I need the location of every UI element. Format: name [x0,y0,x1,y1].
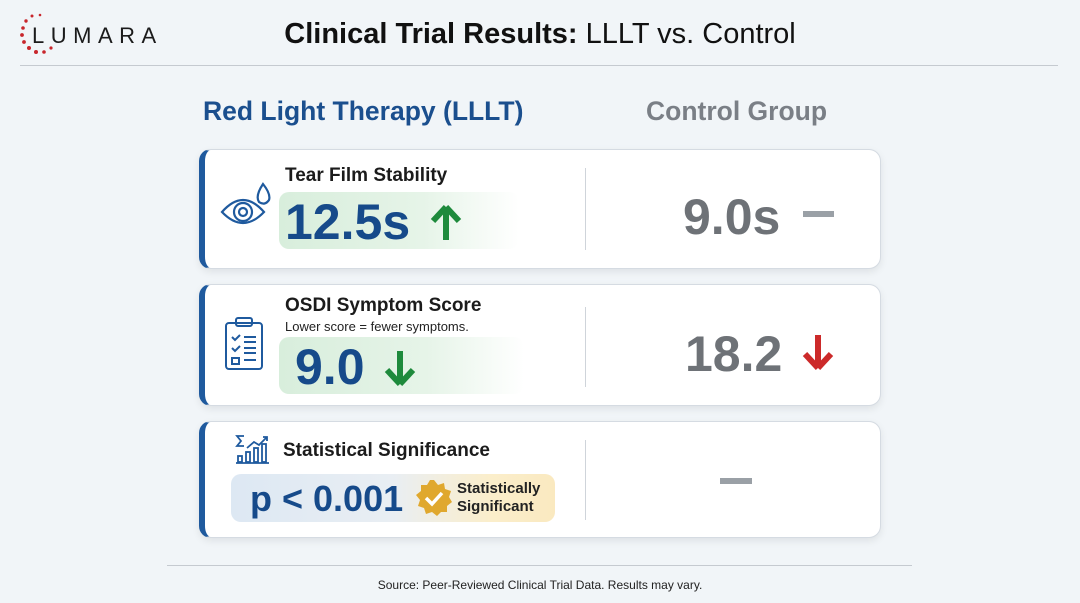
icon: clipboard [225,317,263,370]
value box: Statistically [457,480,540,497]
label: OSDI Symptom Score [285,295,481,316]
value: LLLT: 9.0 [295,339,365,395]
value box: p < 0.001 [250,478,403,519]
card: OSDI [199,284,881,406]
subtitle: Lower score = fewer symptoms. [285,319,469,334]
label: Tear Film Stability [285,165,447,186]
value box: Significant [457,498,534,515]
badge [416,480,452,516]
card: tear film [199,149,881,269]
label: Statistical Significance [283,440,490,461]
value box [231,474,555,522]
title: Clinical Trial Results: LLLT vs. Control [284,18,796,50]
logo [20,14,163,54]
logo: LUMARA [32,23,163,48]
icon: chart [235,435,269,464]
footer source: Source: Peer-Reviewed Clinical Trial Data. Results may vary. [378,578,702,592]
value: control: 9.0s [683,189,780,245]
value: LLLT [279,192,519,249]
value: LLLT: 12.5s [285,194,410,250]
header: control: Control Group [646,96,827,126]
value: LLLT [279,337,524,394]
header: LLLT: Red Light Therapy (LLLT) [203,96,523,126]
value: control: 18.2 [685,326,782,382]
card: significance [199,421,881,538]
icon: eye [220,182,270,224]
value: control dash [720,478,752,484]
